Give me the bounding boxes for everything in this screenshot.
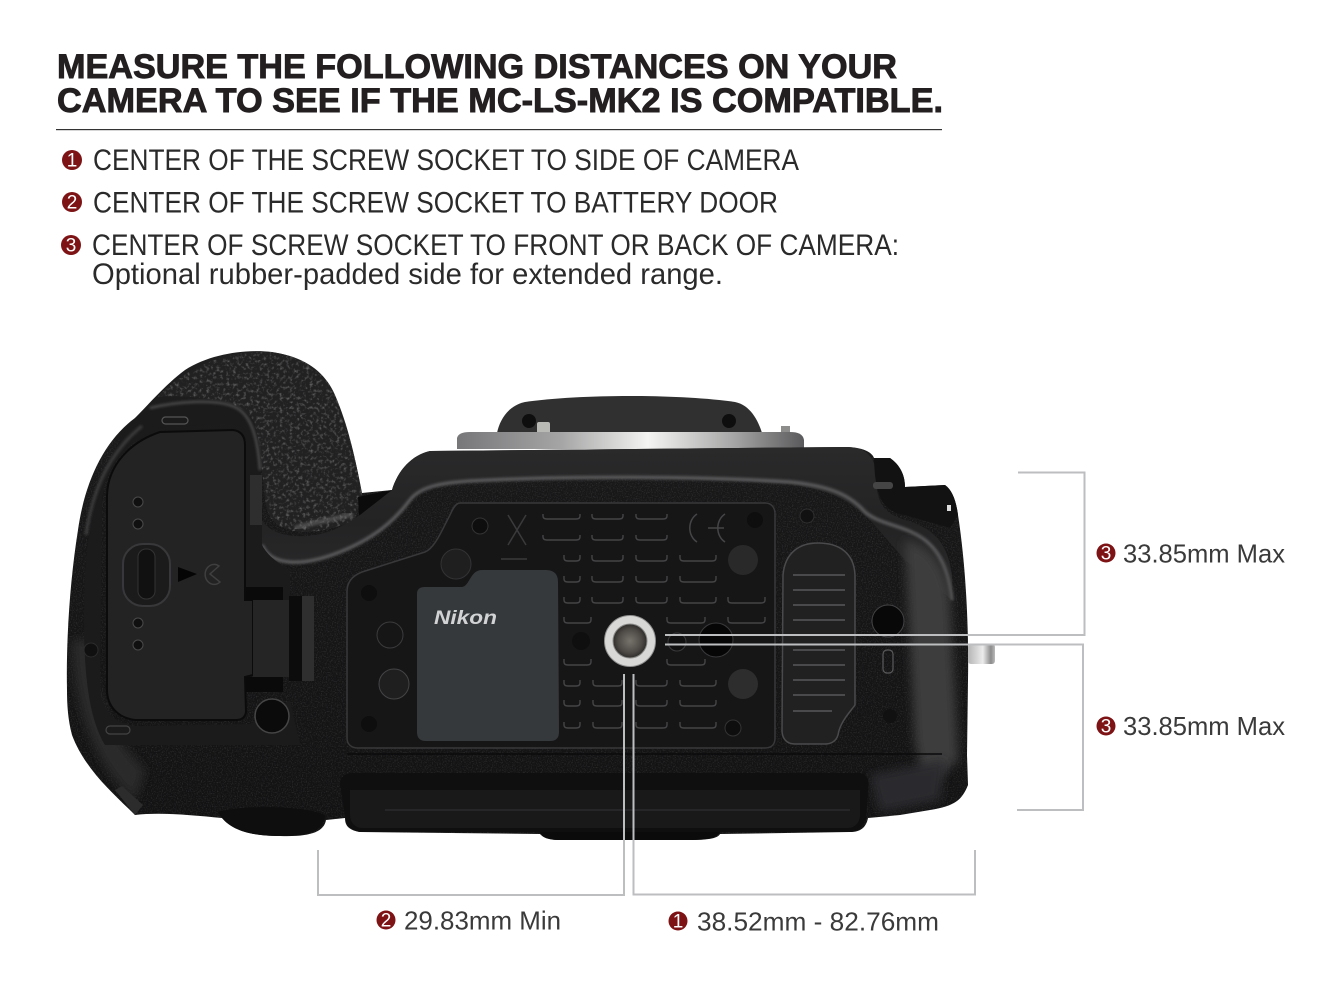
label plate with Nikon logo: Nikon bbox=[434, 608, 497, 629]
callout: 38.52mm to 82.76mm: 1 bbox=[673, 912, 683, 932]
list item 3: CENTER OF SCREW SOCKET TO FRONT OR BACK OF CAMERA: bbox=[92, 229, 899, 262]
body surface grain bbox=[60, 440, 975, 840]
callout: 29.83mm min: 29.83mm Min bbox=[404, 906, 561, 936]
callout: 29.83mm min: 2 bbox=[381, 910, 391, 932]
title: MEASURE THE FOLLOWING DISTANCES ON YOUR bbox=[57, 48, 897, 86]
shoulder ridge highlight bbox=[262, 477, 952, 600]
list item 1: CENTER OF THE SCREW SOCKET TO SIDE OF CAMERA bbox=[93, 144, 799, 177]
battery door bbox=[107, 430, 253, 720]
label plate with Nikon logo bbox=[417, 570, 559, 741]
callout: lower 33.85mm max: 33.85mm Max bbox=[1123, 711, 1285, 741]
top shoulder band bbox=[262, 447, 952, 600]
bracket: 33.85mm lower bbox=[665, 644, 1083, 810]
list item 3 bbox=[61, 229, 899, 291]
accessory pin bbox=[968, 644, 995, 664]
base plate panel bbox=[347, 503, 775, 748]
title: CAMERA TO SEE IF THE MC-LS-MK2 IS COMPATIBLE. bbox=[57, 82, 943, 120]
side door bbox=[782, 509, 904, 744]
tripod screw socket bbox=[572, 616, 733, 666]
list item 1: 1 bbox=[67, 150, 77, 172]
battery door frame bbox=[84, 400, 300, 745]
list item 2: 2 bbox=[67, 192, 77, 214]
bracket: 33.85mm upper bbox=[665, 472, 1084, 635]
lens mount cap and ring bbox=[457, 396, 804, 449]
callout: upper 33.85mm max: 3 bbox=[1101, 544, 1111, 564]
camera photo: underside bbox=[60, 351, 995, 840]
ventilation slots bbox=[543, 514, 765, 728]
callout: lower 33.85mm max: 3 bbox=[1101, 716, 1111, 738]
bracket: 38.52-82.76mm bbox=[634, 674, 975, 894]
title bbox=[57, 48, 943, 120]
list item 2: CENTER OF THE SCREW SOCKET TO BATTERY DOOR bbox=[93, 186, 778, 220]
callout: upper 33.85mm max: 33.85mm Max bbox=[1123, 538, 1285, 568]
right side panel shading bbox=[72, 540, 958, 812]
viewfinder end bbox=[873, 458, 958, 528]
grip leather bbox=[157, 352, 362, 532]
main body silhouette bbox=[67, 351, 968, 840]
callout: 38.52mm to 82.76mm: 38.52mm - 82.76mm bbox=[697, 906, 939, 936]
list item 3: Optional rubber-padded side for extended range. bbox=[92, 258, 723, 291]
bracket: 29.83mm bbox=[318, 674, 624, 895]
bottom edge and battery grip plate bbox=[115, 754, 942, 840]
list item 3: 3 bbox=[66, 236, 76, 256]
battery door hinge bbox=[84, 587, 314, 733]
cavity behind the grip bbox=[358, 490, 398, 530]
